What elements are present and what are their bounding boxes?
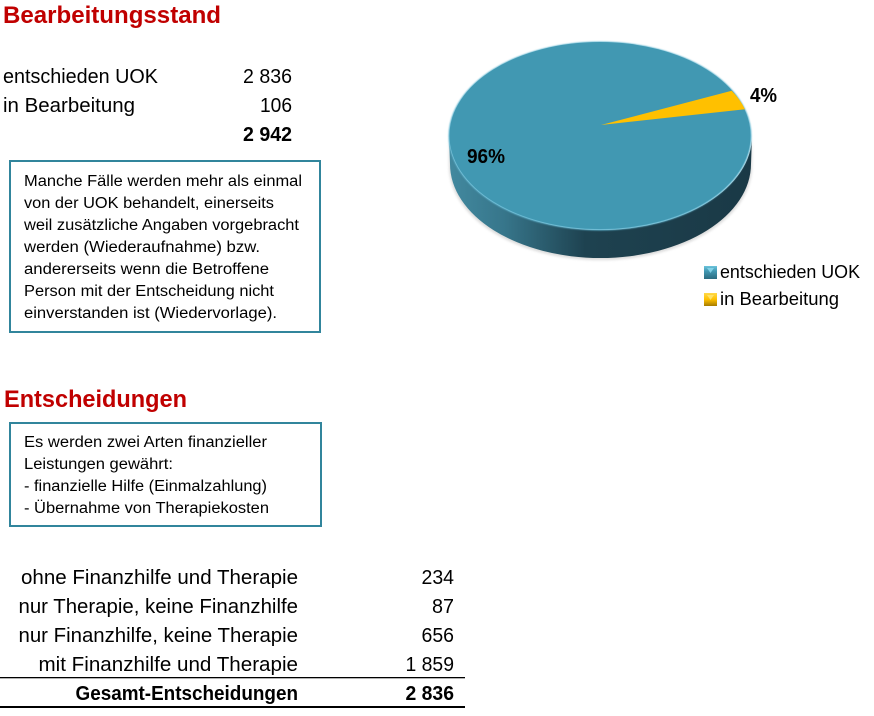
table: Bearbeitungsstand figures: 106: [260, 95, 292, 117]
legend: entschieden UOK: [720, 262, 860, 282]
callout: types of financial benefits: Es werden zwei Arten finanzieller: [24, 434, 267, 451]
table: decisions: nur Finanzhilfe, keine Therapie: [18, 625, 298, 647]
heading: Entscheidungen: Entscheidungen: [4, 386, 187, 413]
legend: in Bearbeitung: [720, 289, 839, 309]
table: decisions: nur Therapie, keine Finanzhilfe: [18, 596, 298, 618]
callout: types of financial benefits: Leistungen gewährt:: [24, 456, 173, 473]
callout: repeated cases note: Manche Fälle werden mehr als einmal: [24, 173, 302, 190]
table: Bearbeitungsstand figures: [3, 66, 292, 146]
callout: types of financial benefits: - Übernahme von Therapiekosten: [24, 499, 269, 517]
callout: repeated cases note: Person mit der Entscheidung nicht: [24, 283, 275, 300]
legend: [704, 262, 860, 309]
label: 4%: 4%: [750, 85, 777, 107]
callout: repeated cases note: einverstanden ist (Wiedervorlage).: [24, 305, 277, 322]
table: decisions: 2 836: [406, 683, 454, 705]
callout: repeated cases note: andererseits wenn die Betroffene: [24, 261, 269, 278]
label: 96%: 96%: [467, 146, 505, 168]
callout: repeated cases note: [10, 161, 320, 332]
table: Bearbeitungsstand figures: entschieden UOK: [3, 66, 159, 88]
heading: Bearbeitungsstand: Bearbeitungsstand: [3, 2, 221, 29]
table: decisions: 87: [432, 596, 454, 618]
callout: types of financial benefits: [10, 423, 321, 526]
callout: repeated cases note: weil zusätzliche Angaben vorgebracht: [23, 217, 300, 234]
table: Bearbeitungsstand figures: in Bearbeitung: [3, 95, 135, 117]
table: decisions: mit Finanzhilfe und Therapie: [38, 654, 298, 676]
callout: repeated cases note: von der UOK behandelt, einerseits: [24, 195, 274, 212]
callout: repeated cases note: werden (Wiederaufnahme) bzw.: [23, 239, 260, 256]
pie chart: 96% decided, 4% in progress: [448, 42, 777, 260]
table: Bearbeitungsstand figures: 2 942: [243, 124, 292, 146]
table: decisions: 234: [422, 567, 454, 589]
table: decisions: 656: [422, 625, 454, 647]
table: Bearbeitungsstand figures: 2 836: [243, 66, 292, 88]
table: decisions: Gesamt-Entscheidungen: [76, 683, 298, 705]
table: decisions: [0, 567, 465, 708]
callout: types of financial benefits: - finanzielle Hilfe (Einmalzahlung): [24, 478, 267, 495]
table: decisions: ohne Finanzhilfe und Therapie: [21, 567, 298, 589]
table: decisions: 1 859: [406, 654, 454, 676]
